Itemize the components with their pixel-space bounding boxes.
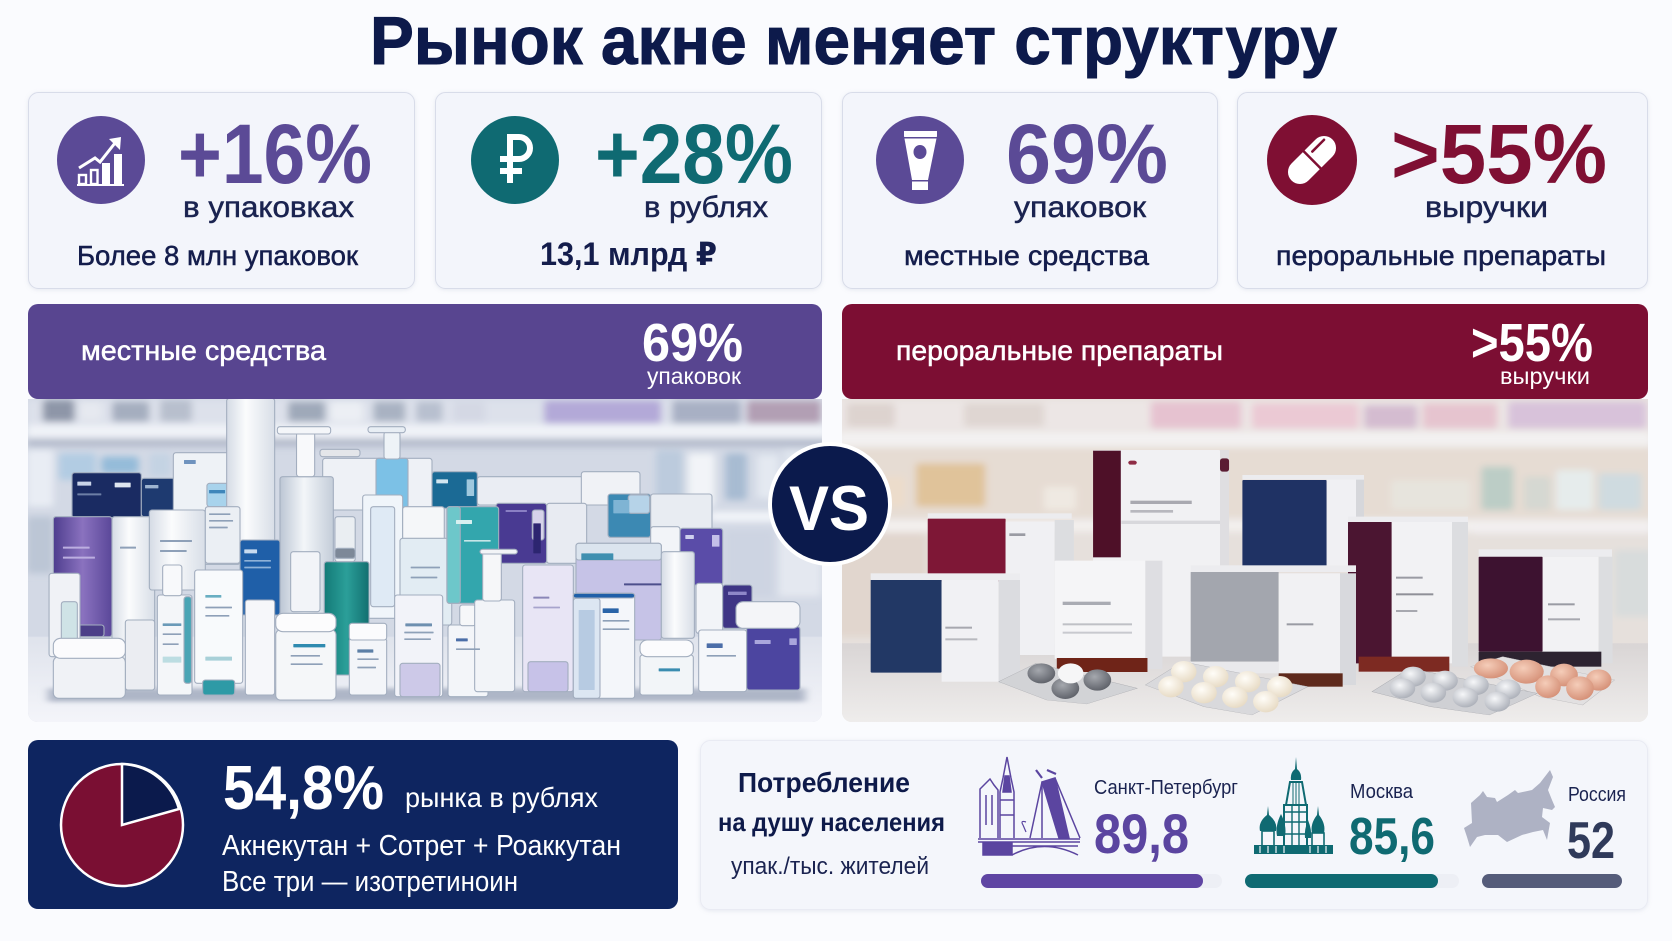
unit: выручки	[1425, 191, 1548, 224]
note: Все три — изотретиноин	[222, 866, 518, 898]
product labels	[63, 460, 797, 690]
unit: упаковок	[647, 363, 742, 389]
box: navy front	[871, 573, 1020, 683]
unit: выручки	[1500, 363, 1590, 389]
value: 54,8%	[223, 754, 384, 823]
tubes and boxes middle	[53, 495, 752, 690]
icon: growth chart	[57, 116, 145, 204]
back row boxes	[72, 398, 723, 585]
box: gray	[1191, 565, 1356, 687]
note: 13,1 млрд ₽	[540, 236, 717, 272]
box: dark plum right	[1479, 549, 1613, 667]
blister: silver	[1372, 667, 1537, 715]
value: 69%	[642, 313, 743, 373]
value: Moscow: 85,6	[1349, 808, 1435, 866]
value caption: рынка в рублях	[405, 782, 598, 813]
blister: gray	[999, 663, 1137, 704]
box: maroon left	[928, 513, 1074, 655]
box: navy	[1242, 475, 1364, 572]
bar: Russia	[1482, 874, 1622, 888]
box: dark maroon tall	[1348, 517, 1468, 672]
VS badge	[770, 444, 890, 564]
icon: Moscow cathedral	[1254, 757, 1333, 854]
pump bottles back	[277, 427, 408, 623]
heading	[718, 767, 945, 880]
pie chart: 54.8%	[61, 764, 183, 886]
value: >55%	[1391, 107, 1607, 201]
bar: Moscow	[1245, 874, 1459, 888]
stat card: +16% in packs	[28, 92, 414, 288]
stat card: >55% oral	[1238, 92, 1648, 288]
box: white with brown band	[1055, 561, 1162, 672]
header band: topical	[28, 304, 822, 399]
brands: Акнекутан + Сотрет + Роаккутан	[222, 830, 621, 862]
note: Более 8 млн упаковок	[77, 240, 359, 271]
panel: oral medications	[836, 304, 1652, 723]
value: >55%	[1471, 313, 1593, 373]
panel: per capita consumption	[700, 740, 1648, 910]
label: Saint Petersburg: Санкт-Петербург	[1094, 777, 1238, 799]
icon: capsule	[1267, 115, 1357, 205]
blister: pink	[1471, 657, 1615, 705]
heading: Потребление	[738, 767, 910, 798]
heading: на душу населения	[718, 807, 945, 837]
bar: Saint Petersburg	[981, 874, 1222, 888]
stat card: 69% topical	[842, 92, 1218, 288]
value: +16%	[178, 107, 372, 201]
icon: ruble	[471, 116, 559, 204]
value: 69%	[1006, 107, 1168, 201]
unit: упаковок	[1014, 191, 1147, 224]
value: +28%	[595, 107, 793, 201]
label: местные средства	[81, 335, 326, 366]
value: Russia: 52	[1567, 812, 1615, 870]
icon: Russia map	[1464, 770, 1555, 847]
counter shadow	[48, 688, 805, 702]
label: Russia: Россия	[1568, 784, 1626, 806]
note: пероральные препараты	[1276, 240, 1606, 271]
label: пероральные препараты	[896, 335, 1223, 366]
header band: oral	[842, 304, 1648, 399]
VS badge: VS	[789, 474, 869, 544]
title: Рынок акне меняет структуру	[370, 3, 1337, 79]
icon: Saint Petersburg skyline	[978, 757, 1080, 855]
box: tall maroon strip	[1093, 450, 1229, 657]
blister: cream	[1145, 661, 1308, 715]
unit: в рублях	[644, 191, 768, 224]
panel: isotretinoin share	[28, 740, 678, 909]
icon: tube	[876, 116, 964, 204]
unit: в упаковках	[183, 191, 354, 224]
panel: topical products	[27, 304, 827, 723]
stat card: +28% in rubles	[436, 92, 822, 288]
front row products	[49, 549, 800, 700]
note: местные средства	[904, 240, 1149, 271]
heading: упак./тыс. жителей	[731, 853, 929, 880]
photo: oral medication boxes and blisters	[836, 397, 1652, 723]
photo: topical products on pharmacy shelf	[27, 397, 827, 723]
label: Moscow: Москва	[1350, 781, 1414, 803]
value: Saint Petersburg: 89,8	[1094, 802, 1189, 865]
